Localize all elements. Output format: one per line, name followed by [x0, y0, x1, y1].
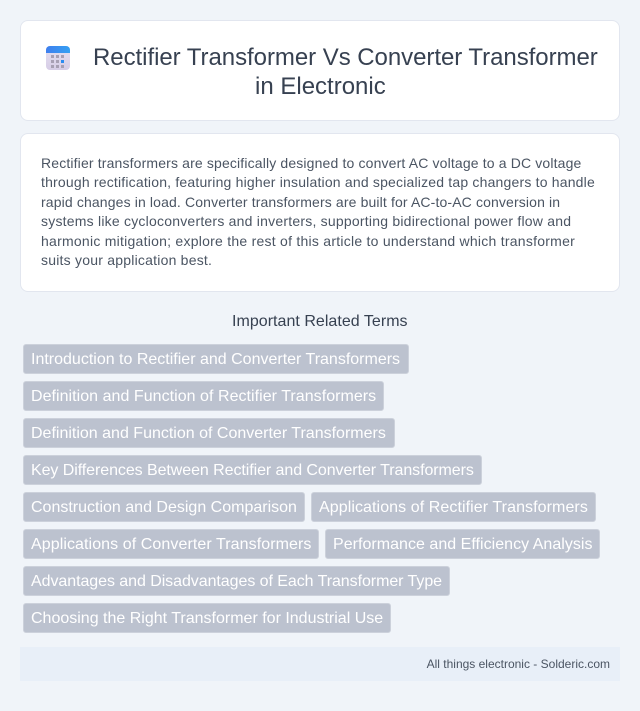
- title: in Electronic: [255, 73, 386, 100]
- tag: Definition and Function of Rectifier Transformers: [31, 388, 376, 405]
- tag: Applications of Rectifier Transformers: [319, 499, 588, 516]
- tag: [23, 344, 409, 374]
- tag: [311, 492, 596, 522]
- icon: calendar: [46, 46, 70, 70]
- summary text: [41, 155, 595, 268]
- tag: [23, 603, 391, 633]
- tag: Applications of Converter Transformers: [31, 536, 312, 553]
- tag: [23, 381, 384, 411]
- title: Rectifier Transformer Vs Converter Transformer: [93, 44, 598, 71]
- heading: important related terms: Important Related Terms: [232, 313, 408, 330]
- footer bar: [20, 647, 620, 681]
- tag: [23, 418, 395, 448]
- tag: Choosing the Right Transformer for Industrial Use: [31, 610, 383, 627]
- tag: [23, 566, 450, 596]
- summary text: harmonic mitigation; explore the rest of this article to understand which transformer: [41, 233, 575, 249]
- tag: Key Differences Between Rectifier and Converter Transformers: [31, 462, 474, 479]
- tag: Introduction to Rectifier and Converter Transformers: [31, 351, 400, 368]
- tag: [325, 529, 600, 559]
- summary text: suits your application best.: [41, 252, 212, 268]
- summary text: rapid changes in load. Converter transformers are built for AC-to-AC conversion in: [41, 194, 560, 210]
- summary text: through rectification, featuring higher insulation and specialized tap changers to handle: [41, 174, 595, 190]
- summary text: Rectifier transformers are specifically designed to convert AC voltage to a DC voltage: [41, 155, 581, 171]
- tag: [23, 492, 305, 522]
- tag list: [23, 344, 600, 633]
- tag: Advantages and Disadvantages of Each Transformer Type: [31, 573, 442, 590]
- summary text: systems like cycloconverters and inverters, supporting bidirectional power flow and: [41, 213, 571, 229]
- tag: Definition and Function of Converter Transformers: [31, 425, 386, 442]
- header panel: [20, 20, 620, 121]
- tag: [23, 529, 319, 559]
- title: [93, 44, 598, 100]
- tag: Performance and Efficiency Analysis: [333, 536, 593, 553]
- tag: Construction and Design Comparison: [31, 499, 297, 516]
- summary panel: [20, 133, 620, 292]
- footer text: All things electronic - Solderic.com: [427, 657, 610, 671]
- tag: [23, 455, 482, 485]
